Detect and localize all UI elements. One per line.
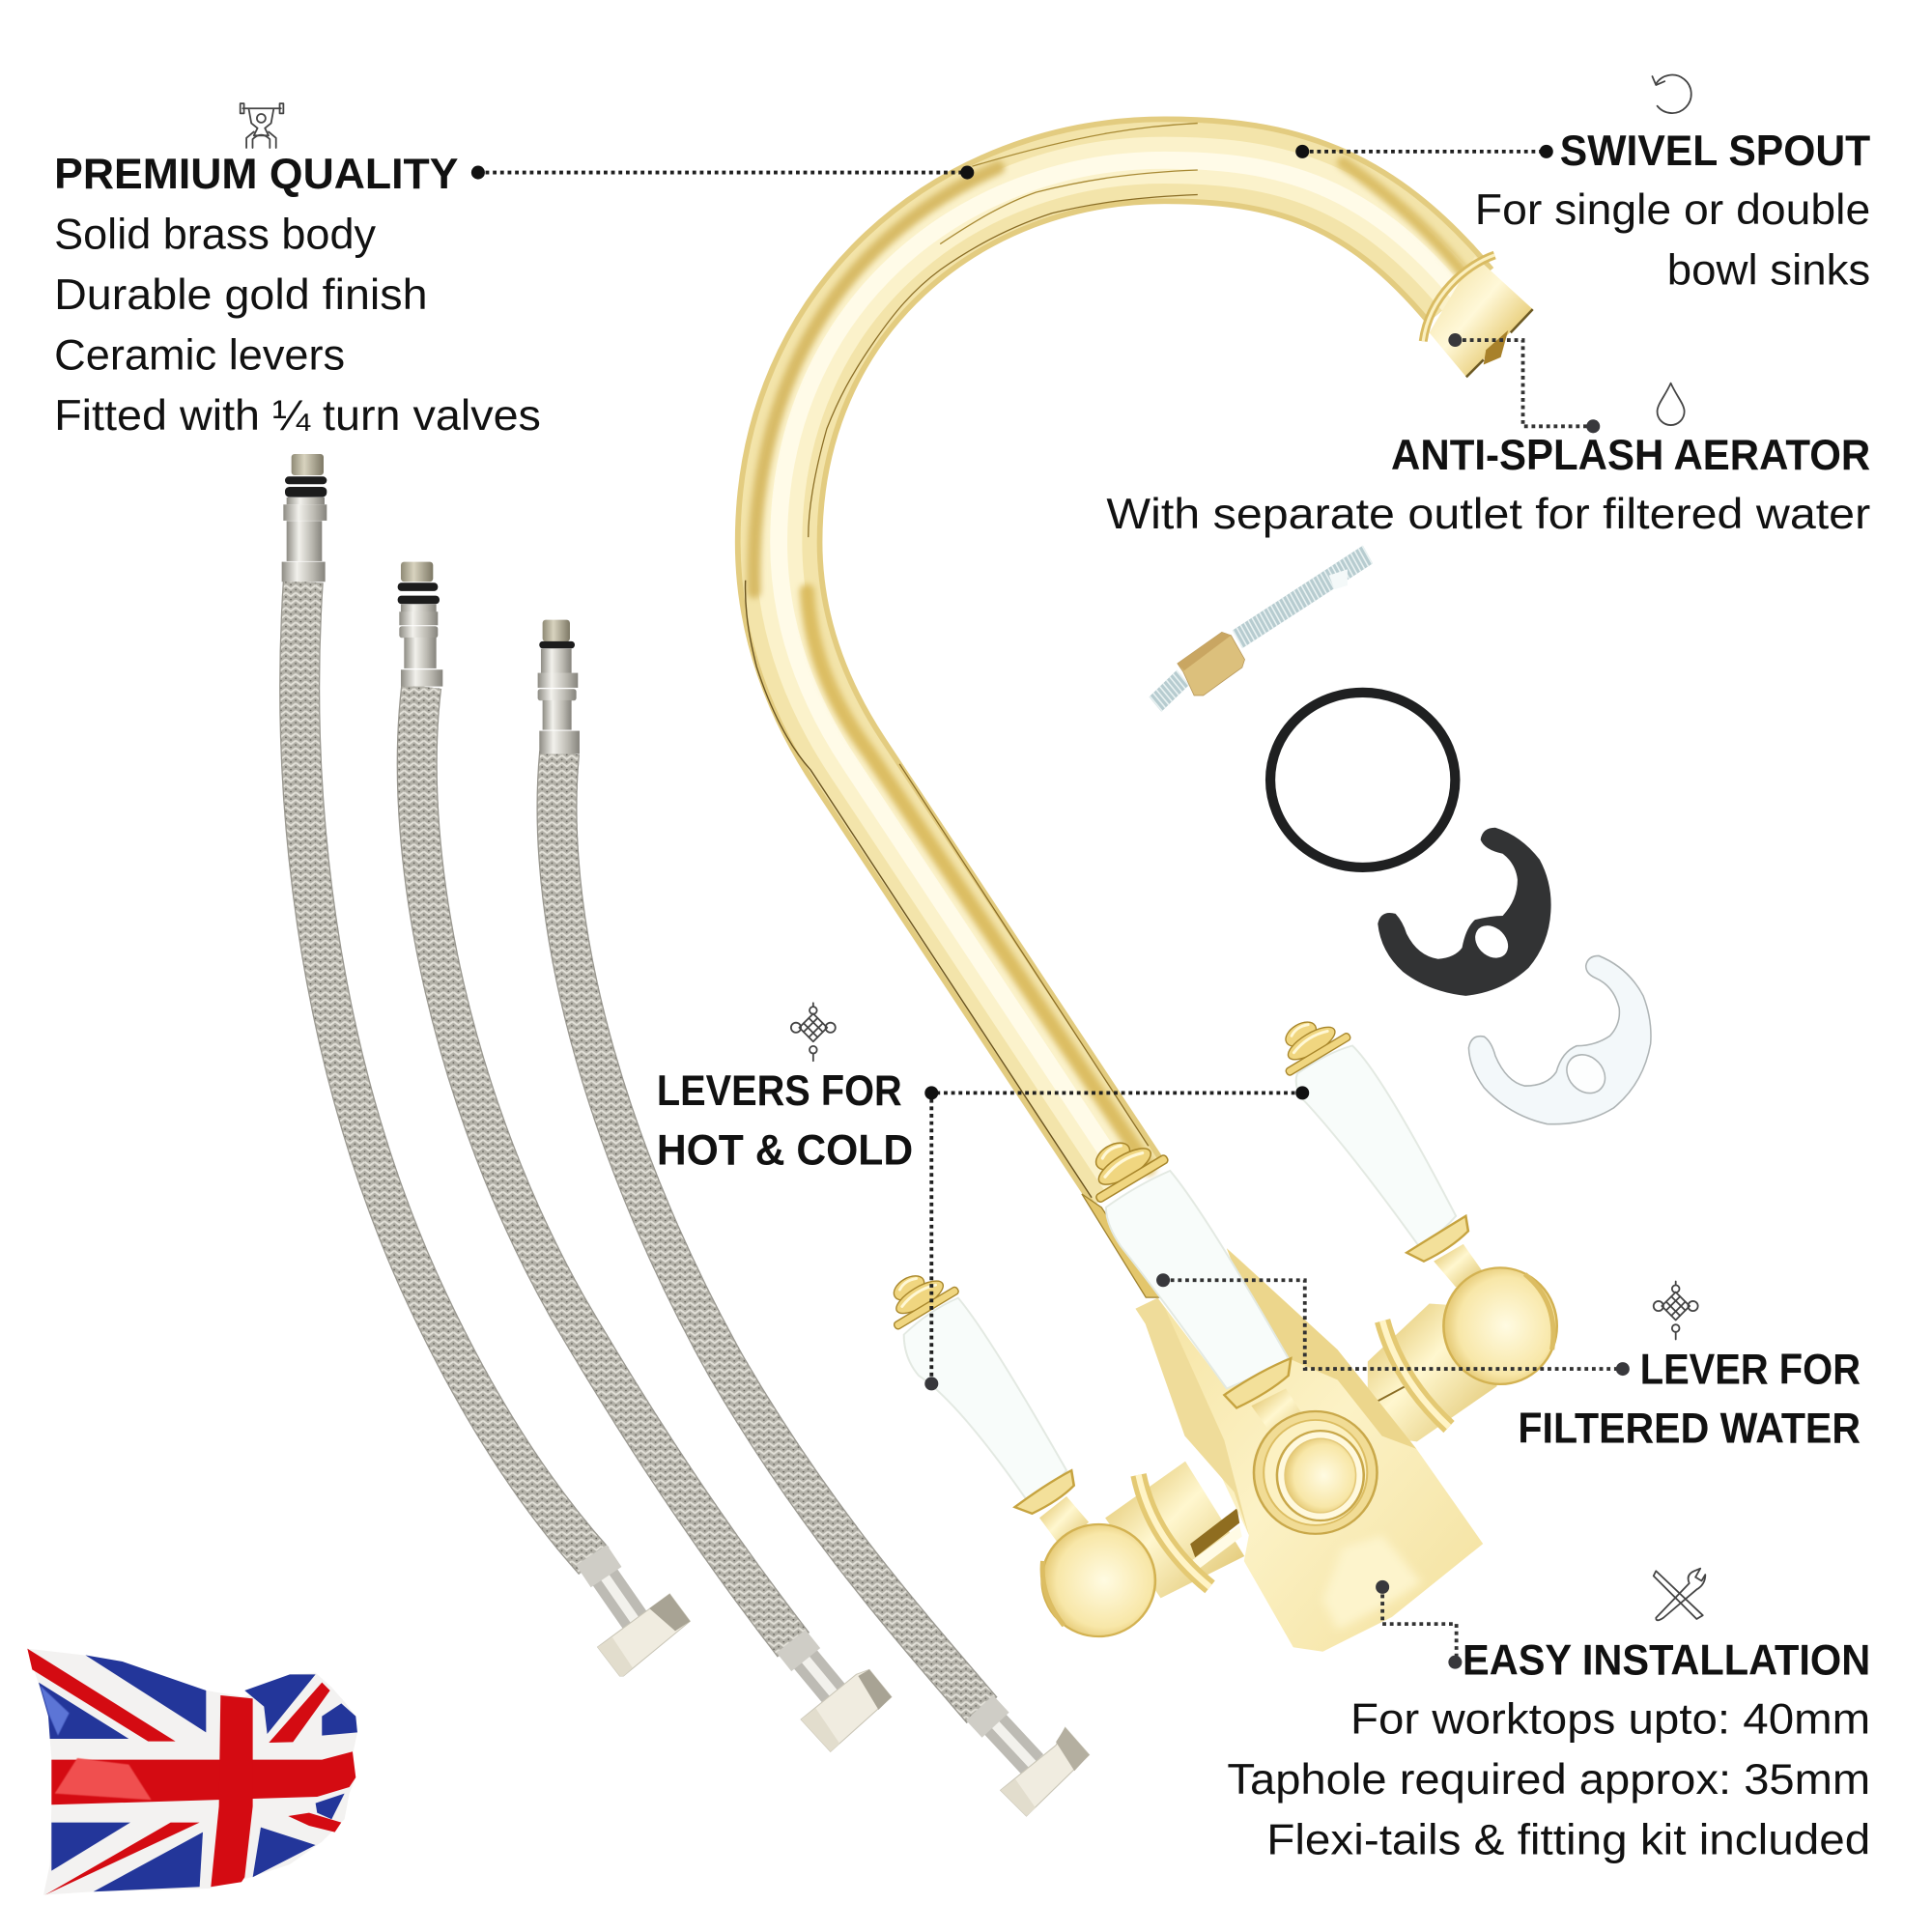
text: lever for filtered water: LEVER FOR	[1640, 1346, 1861, 1393]
text: easy installation: Taphole required approx: 35mm	[1227, 1756, 1870, 1804]
middle lever cap	[1076, 1123, 1169, 1204]
callout line: premium quality	[471, 166, 974, 180]
text: swivel spout: For single or double	[1475, 186, 1870, 234]
text: swivel spout: SWIVEL SPOUT	[1560, 128, 1870, 175]
cross arm left	[1105, 1462, 1244, 1598]
text: premium quality: PREMIUM QUALITY	[54, 151, 459, 198]
cross arm right	[1368, 1303, 1497, 1441]
callout line: easy installation	[1376, 1580, 1462, 1669]
icon: weightlifter	[241, 103, 283, 148]
text: premium quality: Solid brass body	[54, 212, 377, 259]
text: lever for filtered water	[1518, 1346, 1861, 1453]
swivel spout tube	[746, 124, 1479, 1198]
spout nozzle	[1423, 255, 1533, 377]
text: levers for hot and cold	[657, 1067, 913, 1174]
metal washer	[1468, 955, 1651, 1124]
callout line: swivel spout	[1295, 145, 1553, 158]
text: anti-splash aerator: With separate outlet for filtered water	[1106, 491, 1870, 538]
text: premium quality: Fitted with ¼ turn valves	[54, 392, 541, 440]
flexi hose 3	[538, 620, 1090, 1816]
text: lever for filtered water: FILTERED WATER	[1518, 1406, 1861, 1453]
text: swivel spout: bowl sinks	[1667, 247, 1870, 295]
text: levers for hot and cold: HOT & COLD	[657, 1126, 913, 1174]
callout line: aerator	[1448, 333, 1600, 433]
callout line: filtered water lever	[1156, 1273, 1630, 1376]
middle lever	[1106, 1171, 1378, 1534]
text: anti-splash aerator	[1106, 432, 1870, 538]
right lever cap	[1268, 1005, 1351, 1076]
union jack flag	[27, 1649, 357, 1895]
flexi hose 1	[282, 454, 690, 1676]
icon: water drop	[1658, 384, 1685, 425]
text: easy installation: For worktops upto: 40mm	[1350, 1696, 1870, 1744]
text: levers for hot and cold: LEVERS FOR	[657, 1067, 902, 1115]
icon: knot filtered	[1654, 1282, 1698, 1339]
text: easy installation: EASY INSTALLATION	[1463, 1636, 1870, 1684]
text: swivel spout	[1475, 128, 1870, 295]
left lever cap	[876, 1259, 959, 1330]
text: anti-splash aerator: ANTI-SPLASH AERATOR	[1391, 432, 1870, 479]
text: easy installation	[1227, 1636, 1870, 1864]
rubber o-ring	[1270, 693, 1455, 867]
text: easy installation: Flexi-tails & fitting kit included	[1266, 1817, 1870, 1864]
black gasket	[1378, 828, 1551, 996]
tap body	[1136, 1248, 1483, 1652]
fixing bolt	[1155, 554, 1368, 704]
text: premium quality: Durable gold finish	[54, 271, 428, 319]
callout line: levers for hot and cold	[924, 1086, 1309, 1390]
text: premium quality	[54, 151, 541, 440]
gold tap	[746, 124, 1557, 1652]
icon: knot levers	[791, 1003, 836, 1061]
icon: tools	[1654, 1569, 1705, 1620]
flexi hose 2	[398, 562, 892, 1751]
left lever	[904, 1298, 1155, 1636]
text: premium quality: Ceramic levers	[54, 332, 345, 380]
icon: rotate arrow	[1652, 75, 1691, 113]
right lever	[1296, 1045, 1557, 1384]
